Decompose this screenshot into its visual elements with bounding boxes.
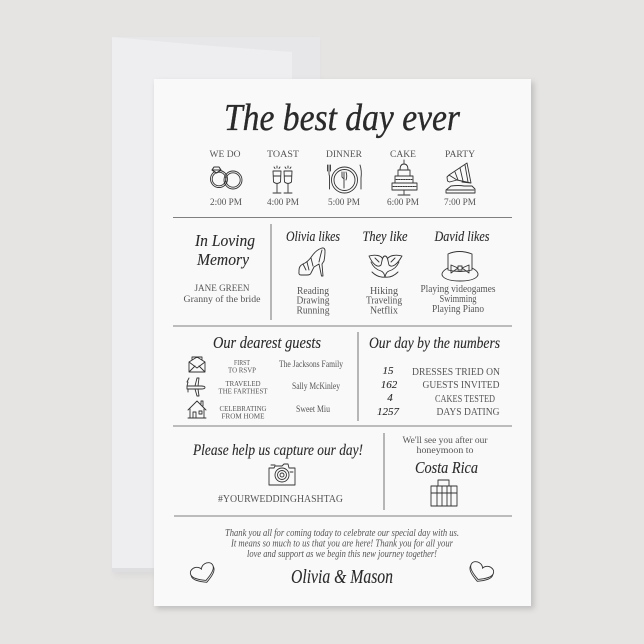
likes lists: Hiking xyxy=(370,286,399,297)
guest categories: TRAVELED xyxy=(226,379,261,388)
panel: dearest guests xyxy=(187,333,343,420)
title: The best day ever xyxy=(224,97,460,139)
heading: Memory xyxy=(196,250,249,269)
panel: likes xyxy=(286,229,496,316)
honeymoon text: honeymoon to xyxy=(416,445,474,455)
likes lists: Playing videogames xyxy=(420,284,496,295)
heading xyxy=(194,231,255,269)
numbers: 1257 xyxy=(377,406,400,418)
schedule times: 4:00 PM xyxy=(267,198,300,208)
guest names: The Jacksons Family xyxy=(279,360,343,370)
icon: left heart xyxy=(189,561,218,587)
memorial text: Granny of the bride xyxy=(184,294,260,305)
icon: house xyxy=(188,401,206,418)
number labels: DRESSES TRIED ON xyxy=(412,367,500,378)
schedule times: 6:00 PM xyxy=(387,198,420,208)
likes headings: Olivia likes xyxy=(286,229,340,245)
heading: In Loving xyxy=(194,231,255,250)
number labels: CAKES TESTED xyxy=(435,394,495,405)
icon: airplane xyxy=(187,378,205,396)
thank you note: It means so much to us that you are here! Thank you for all your xyxy=(230,538,453,550)
honeymoon text xyxy=(402,435,488,455)
number labels: DAYS DATING xyxy=(436,407,500,418)
divider rule 4 xyxy=(174,515,512,517)
divider rule 3 xyxy=(173,425,512,427)
likes lists: Drawing xyxy=(296,296,330,306)
numbers xyxy=(377,365,400,418)
memorial text xyxy=(184,284,260,305)
guest names xyxy=(279,360,343,415)
likes lists: Traveling xyxy=(366,296,403,306)
panel: schedule xyxy=(210,150,477,208)
icon: rings xyxy=(210,167,242,189)
panel: day by the numbers xyxy=(369,335,500,418)
icon: gramophone xyxy=(446,163,475,193)
likes lists: Playing Piano xyxy=(432,304,484,315)
guest names: Sweet Miu xyxy=(296,405,330,415)
panel: thank you xyxy=(189,528,495,588)
guest categories: FIRST xyxy=(234,358,250,367)
panel: in loving memory xyxy=(184,231,260,305)
memorial text: JANE GREEN xyxy=(194,284,250,294)
numbers: 15 xyxy=(382,365,394,377)
likes lists xyxy=(296,284,496,316)
icon: doves xyxy=(369,255,402,277)
schedule labels: DINNER xyxy=(326,150,363,160)
guest categories: THE FARTHEST xyxy=(218,386,268,396)
thank you note: love and support as we begin this new journey together! xyxy=(247,549,437,560)
guest categories xyxy=(218,358,268,420)
numbers: 4 xyxy=(387,392,393,404)
likes headings: They like xyxy=(362,229,408,245)
panel: capture our day xyxy=(192,442,363,505)
hashtag: #YOURWEDDINGHASHTAG xyxy=(218,494,343,505)
honeymoon text: We'll see you after our xyxy=(402,435,488,445)
schedule labels: TOAST xyxy=(267,150,299,160)
icon: right heart xyxy=(466,560,495,586)
icon: camera xyxy=(269,464,295,485)
icon: suitcase xyxy=(431,480,457,506)
likes lists: Swimming xyxy=(440,294,477,305)
schedule labels: CAKE xyxy=(390,150,416,160)
guest categories: TO RSVP xyxy=(228,366,256,374)
likes lists: Netflix xyxy=(370,306,399,316)
signature: Olivia & Mason xyxy=(291,566,393,588)
heading: Our day by the numbers xyxy=(369,335,500,352)
icon: high heel shoe xyxy=(299,248,325,276)
heading: Our dearest guests xyxy=(213,333,321,352)
number labels xyxy=(412,367,500,418)
schedule times xyxy=(210,198,477,208)
schedule labels xyxy=(210,150,475,160)
icon: top hat with bow tie xyxy=(442,252,478,281)
schedule labels: PARTY xyxy=(445,150,475,160)
schedule labels: WE DO xyxy=(210,150,241,160)
divider rule 2 xyxy=(173,325,512,327)
icon: champagne glasses xyxy=(273,166,292,193)
panel: honeymoon xyxy=(402,435,488,506)
numbers: 162 xyxy=(381,379,398,391)
schedule times: 5:00 PM xyxy=(328,198,361,208)
heading: Please help us capture our day! xyxy=(192,442,363,459)
likes headings: David likes xyxy=(434,229,490,245)
likes lists: Reading xyxy=(297,286,330,297)
divider rule 1 xyxy=(173,216,512,218)
card xyxy=(154,79,534,609)
icon: dinner plate xyxy=(328,165,361,193)
destination: Costa Rica xyxy=(415,458,478,477)
schedule times: 7:00 PM xyxy=(444,198,477,208)
guest categories: CELEBRATING xyxy=(220,404,267,413)
icon: wedding cake xyxy=(392,160,417,195)
icon: envelope xyxy=(189,357,205,372)
envelope behind card xyxy=(112,37,320,576)
likes headings xyxy=(286,229,490,245)
thank you note: Thank you all for coming today to celebrate our special day with us. xyxy=(225,528,459,539)
thank you note xyxy=(225,528,459,560)
likes lists: Running xyxy=(296,306,330,316)
guest categories: FROM HOME xyxy=(222,412,265,420)
schedule times: 2:00 PM xyxy=(210,198,243,208)
number labels: GUESTS INVITED xyxy=(422,380,500,391)
guest names: Sally McKinley xyxy=(292,382,340,392)
